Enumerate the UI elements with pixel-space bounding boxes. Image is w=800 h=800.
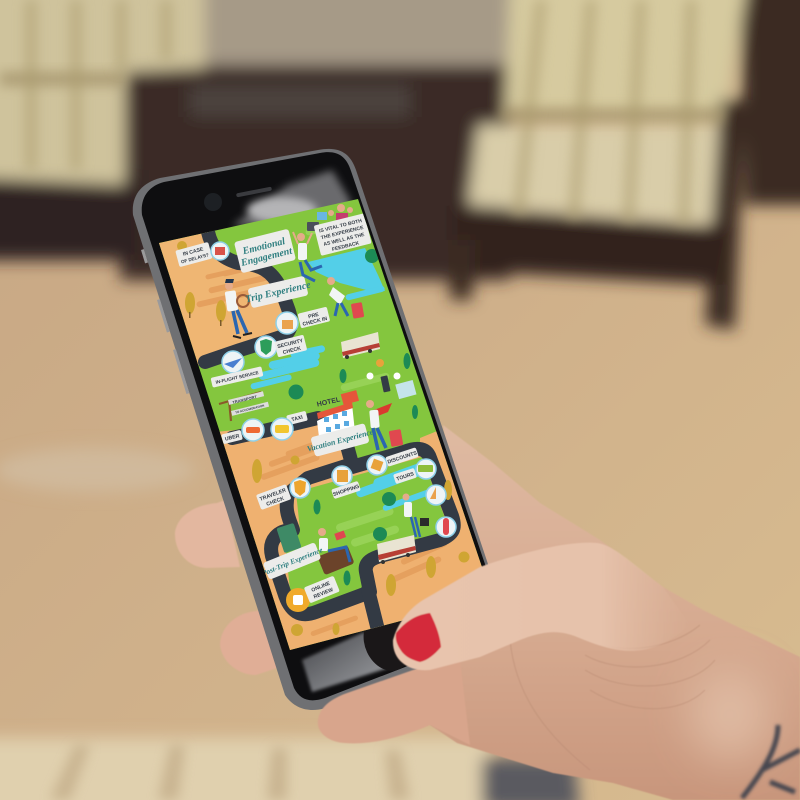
label: online review: ONLINE	[311, 581, 332, 594]
infographic on screen	[159, 199, 482, 650]
label: in case of delays: IN CASE	[182, 246, 205, 258]
label: taxi	[286, 411, 308, 425]
tree: right green	[404, 353, 410, 369]
tree: green small lower	[314, 500, 320, 514]
icon: discounts	[367, 455, 387, 475]
lower glass reflection	[302, 632, 388, 692]
road: exit	[368, 590, 378, 630]
label: traveler check: TRAVELER	[259, 488, 287, 503]
tree: green centre	[288, 384, 304, 400]
tree: orange right edge	[444, 480, 452, 500]
label: pre check in: PRE	[308, 312, 320, 320]
speaker and camera	[204, 187, 272, 211]
camper van lower	[377, 535, 416, 564]
tree: small green	[340, 369, 346, 383]
icon: pre check in	[276, 312, 298, 334]
characters	[225, 204, 429, 575]
label: in case of delays: OF DELAYS?	[180, 252, 210, 265]
tree: orange round	[290, 456, 300, 464]
tree: orange zone left	[185, 292, 195, 318]
icon: tour bus	[416, 459, 436, 479]
light green dashes	[305, 222, 400, 548]
digital and photo icons	[366, 359, 417, 399]
road: middle path	[232, 418, 454, 614]
orange zone top left	[159, 232, 282, 365]
label: taxi: TAXI	[291, 415, 304, 423]
orange zone bottom	[220, 425, 482, 650]
tree: green lower	[382, 492, 396, 506]
red nail	[396, 613, 441, 662]
tree: orange bottom small	[332, 623, 340, 635]
thumb with red nail	[393, 543, 690, 670]
title: post-trip experience: Post-Trip Experience	[260, 545, 325, 578]
tree: orange lower left	[252, 459, 262, 483]
tree: lower right small	[412, 405, 418, 419]
label: is vital: AS WELL AS THE	[323, 232, 366, 248]
road: upper path	[205, 232, 291, 362]
home button	[355, 607, 419, 679]
floor slat stripes	[50, 745, 410, 800]
trees	[177, 241, 470, 636]
orange dashes	[196, 265, 448, 637]
label: pre check in: CHECK IN	[302, 316, 328, 328]
jumping man	[293, 232, 322, 281]
label: is vital: FEEDBACK	[331, 240, 360, 253]
lower finger under phone	[318, 660, 470, 745]
label: online review: REVIEW	[313, 587, 334, 600]
camper van upper	[341, 332, 380, 359]
label: security check: CHECK	[282, 346, 302, 356]
road	[205, 232, 454, 630]
tree: green bottom	[344, 570, 350, 586]
label: tours	[393, 468, 417, 484]
label: in-flight service	[211, 366, 263, 388]
tree: orange bottom right	[426, 556, 436, 578]
icon: security shield	[255, 336, 277, 358]
title: vacation experience: Vacation Experience	[306, 427, 375, 454]
river top	[250, 248, 385, 390]
phone	[133, 149, 490, 710]
tree: orange zone second	[216, 300, 226, 326]
man on sofa with laptop	[317, 528, 355, 575]
man with suitcase	[327, 277, 364, 319]
icon: uber car	[242, 419, 264, 441]
label: in case of delays	[175, 242, 212, 267]
transport sign: TRANSPORT	[232, 394, 258, 405]
green zone under hotel	[356, 438, 420, 458]
transport sign: TO ACCOMODATION	[235, 403, 265, 415]
label: online review	[304, 576, 340, 603]
hotel label: HOTEL	[316, 396, 342, 409]
label: uber: UBER	[224, 433, 240, 443]
top group of people and camera	[307, 204, 353, 231]
icon: taxi	[271, 418, 293, 440]
label: tours: TOURS	[396, 471, 415, 483]
tattoo on wrist	[742, 725, 800, 798]
label: pre check in	[298, 307, 330, 328]
icon: sailboat	[426, 485, 446, 505]
tree: orange round right	[458, 552, 470, 562]
title: emotional engagement: Emotional	[241, 236, 286, 257]
river lower	[356, 464, 427, 511]
tree: orange bottom left	[291, 624, 303, 636]
label: security check: SECURITY	[277, 338, 304, 350]
wrist highlight	[690, 670, 770, 760]
label: uber	[221, 430, 243, 444]
label: discounts: DISCOUNTS	[387, 450, 418, 466]
green zone lower	[286, 457, 451, 612]
icon: traveler check shield	[290, 478, 310, 498]
icon: calendar	[211, 242, 229, 260]
cushion band shadows	[0, 72, 725, 122]
tree: green top right	[365, 249, 379, 263]
blurred screen reflection	[232, 170, 352, 226]
icon: in-flight plane	[222, 351, 244, 373]
man with red cape	[366, 400, 403, 450]
icon: surfboards	[436, 517, 456, 537]
wrecked car	[276, 523, 302, 553]
label: in-flight service: IN-FLIGHT SERVICE	[215, 370, 259, 385]
tree: top corner	[177, 241, 187, 251]
palm creases	[510, 625, 715, 770]
label: shopping: SHOPPING	[332, 484, 360, 498]
label: is vital: THE EXPERIENCE	[320, 225, 365, 241]
title: emotional engagement	[234, 229, 296, 273]
title: emotional engagement: Engagement	[239, 245, 294, 269]
volume buttons	[141, 249, 189, 394]
transport sign	[219, 391, 269, 421]
man with briefcase	[402, 494, 429, 537]
label: security check	[274, 335, 307, 357]
tree: orange bottom centre	[386, 574, 396, 596]
green ground	[159, 199, 482, 650]
icon: shopping bag	[332, 466, 352, 486]
title: vacation experience	[304, 421, 376, 458]
label: is vital: IS VITAL TO BOTH	[319, 218, 363, 235]
tree: green lower 2	[373, 527, 387, 541]
hand: fingers and palm behind phone	[175, 425, 800, 800]
cushion stripes	[25, 0, 697, 224]
hotel	[316, 390, 359, 436]
man with wheel	[225, 279, 252, 338]
label: is vital	[314, 213, 372, 256]
icon: online review thumb	[286, 588, 310, 612]
title: trip experience: Trip Experience	[244, 280, 312, 305]
phone body	[133, 149, 490, 710]
label: traveler check	[256, 484, 291, 510]
label: traveler check: CHECK	[266, 496, 285, 508]
phone front glass	[142, 152, 487, 700]
